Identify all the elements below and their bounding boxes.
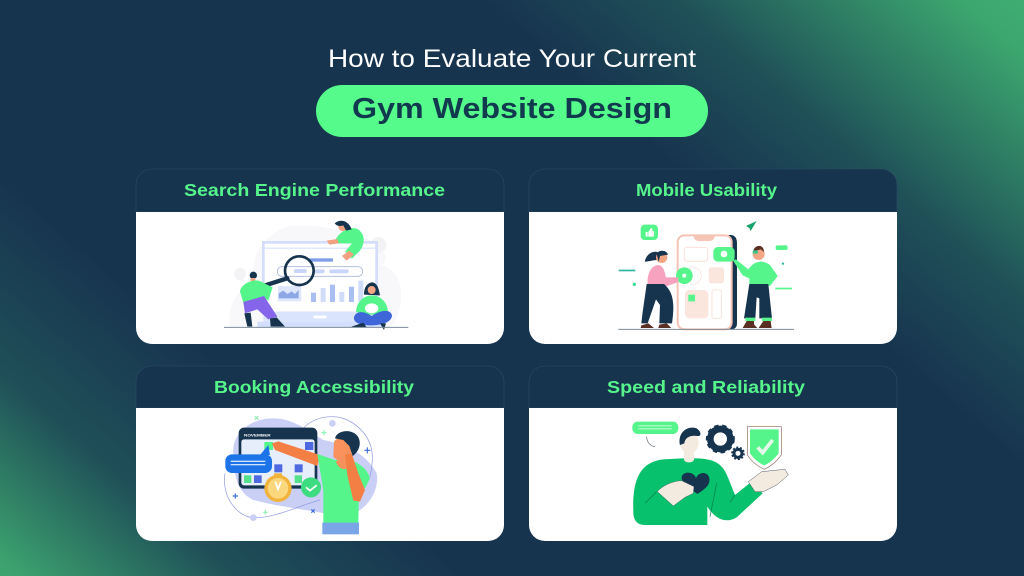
chat bubble	[632, 422, 678, 447]
icon: thumbs up	[641, 225, 658, 240]
panel: speed and reliability	[529, 366, 897, 541]
panel: mobile usability	[529, 169, 897, 344]
orbit line	[225, 417, 372, 518]
person bottom right	[352, 282, 392, 330]
person top	[327, 221, 364, 261]
card header: Speed and Reliability	[607, 377, 805, 397]
phone	[678, 235, 737, 329]
woman	[641, 251, 678, 328]
card body	[136, 408, 504, 541]
icon: chart bubble	[713, 247, 735, 262]
card header: Mobile Usability	[636, 180, 777, 200]
card header	[136, 169, 504, 212]
title pill: Gym Website Design	[352, 93, 672, 125]
heart	[682, 473, 709, 494]
card header: Booking Accessibility	[214, 377, 414, 397]
card header	[529, 366, 897, 408]
card body	[529, 408, 897, 541]
panel: booking accessibility	[136, 366, 504, 541]
clock	[264, 473, 292, 502]
gear large	[707, 426, 733, 452]
card body	[136, 212, 504, 344]
card header: Search Engine Performance	[184, 180, 445, 200]
card body	[529, 212, 897, 344]
person	[272, 431, 370, 534]
illustration: website analysis with magnifier	[224, 221, 408, 330]
title line: How to Evaluate Your Current	[328, 45, 696, 73]
check badge	[301, 477, 321, 497]
person body	[633, 428, 788, 525]
illustration: person with heart and shield	[632, 422, 788, 525]
icon: heart circle	[676, 267, 693, 284]
speech bubble	[225, 445, 272, 473]
sparkles	[233, 416, 370, 515]
illustration: calendar booking	[225, 416, 377, 534]
card header	[529, 169, 897, 212]
purple blob	[233, 418, 377, 517]
illustration: people using a phone	[618, 221, 794, 329]
title pill	[316, 85, 708, 137]
gear small	[732, 447, 744, 459]
icon: paper plane	[746, 221, 757, 231]
shield	[747, 427, 781, 469]
card header	[136, 366, 504, 408]
person left	[240, 272, 285, 327]
panel: search engine performance	[136, 169, 504, 344]
calendar: NOVEMBER	[244, 432, 271, 437]
magnifier	[263, 256, 314, 286]
decorative marks	[619, 245, 792, 289]
man	[733, 246, 778, 328]
monitor	[257, 242, 384, 327]
calendar	[239, 428, 317, 489]
